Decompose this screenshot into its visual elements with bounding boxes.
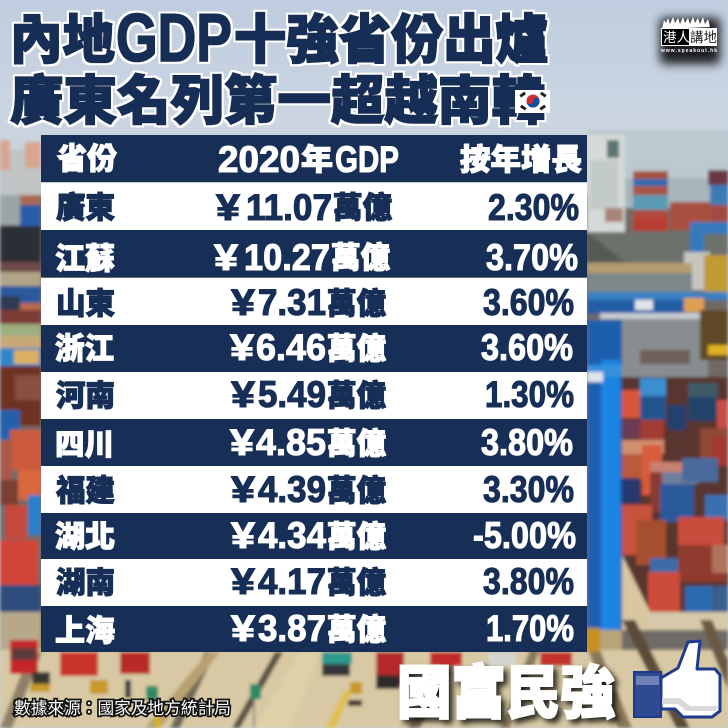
row: 山東: 3.60% <box>483 282 574 323</box>
row: 湖南: 湖南 <box>56 558 115 602</box>
logo: speakout.hk: 講地 <box>690 26 718 46</box>
slogan: 國富民強 <box>397 646 615 728</box>
row: 廣東: 萬億 <box>333 183 392 227</box>
row: 湖北 <box>41 512 587 559</box>
row: 廣東 <box>41 183 587 230</box>
row: 四川: ¥ <box>230 422 254 463</box>
row: 浙江: 浙江 <box>55 324 114 368</box>
row: 福建: ¥ <box>231 469 255 510</box>
row: 河南 <box>41 371 587 419</box>
icon: South Korea flag <box>515 90 550 113</box>
row: 福建 <box>41 466 587 513</box>
row: 湖南: 萬億 <box>327 558 386 602</box>
row: 廣東: 2.30% <box>488 187 579 228</box>
title: 內地 <box>10 0 115 74</box>
trucks <box>10 640 38 674</box>
row: 山東: 山東 <box>56 279 115 323</box>
logo: speakout.hk <box>660 17 720 64</box>
row: 山東: 7.31 <box>258 282 326 323</box>
row: 河南: 河南 <box>56 371 115 415</box>
row: 上海: 1.70% <box>486 608 574 649</box>
row: 湖南: 4.17 <box>258 561 326 602</box>
row: 河南: 1.30% <box>485 374 574 415</box>
containers <box>622 377 728 630</box>
row: 上海: 上海 <box>55 606 115 650</box>
row: 四川: 3.80% <box>481 422 573 463</box>
row: 山東: 萬億 <box>327 279 386 323</box>
row: 上海 <box>41 605 587 652</box>
row: 湖北: 4.34 <box>258 515 326 556</box>
row: 湖南: 3.80% <box>483 561 574 602</box>
icon: thumbs up <box>634 641 720 717</box>
row: 廣東: 11.07 <box>246 187 332 228</box>
row: 廣東: ¥ <box>216 187 240 228</box>
table header row: 2020 <box>218 139 300 180</box>
row: 湖北: 湖北 <box>55 512 115 556</box>
title: GDP <box>116 0 232 76</box>
row: 江蘇: ¥ <box>214 237 238 278</box>
row: 四川: 4.85 <box>256 422 326 463</box>
row: 湖北: -5.00% <box>473 515 576 556</box>
row: 浙江: 6.46 <box>256 327 326 368</box>
table header row: 年 <box>301 135 333 179</box>
row: 上海: ¥ <box>231 608 255 649</box>
table header row: GDP <box>335 139 399 180</box>
right photo area <box>587 130 728 180</box>
row: 山東: ¥ <box>231 282 255 323</box>
row: 上海: 3.87 <box>258 608 326 649</box>
row: 江蘇 <box>41 230 587 278</box>
row: 湖北: 萬億 <box>327 512 386 556</box>
row: 湖南: ¥ <box>231 561 255 602</box>
row: 江蘇: 江蘇 <box>55 234 115 278</box>
row: 河南: 5.49 <box>258 374 326 415</box>
title: 十強省份出爐 <box>234 0 548 74</box>
row: 四川: 萬億 <box>327 419 386 463</box>
title <box>10 0 548 135</box>
row: 福建: 3.30% <box>483 469 574 510</box>
source note: 數據來源：國家及地方統計局 <box>14 694 231 719</box>
row: 浙江: 3.60% <box>481 327 573 368</box>
row: 福建: 福建 <box>56 466 115 510</box>
row: 湖南 <box>41 558 587 606</box>
bottom yard <box>0 650 728 728</box>
row: 福建: 4.39 <box>258 469 326 510</box>
row: 河南: 萬億 <box>327 371 386 415</box>
logo: speakout.hk: 港人 <box>663 26 690 46</box>
logo: speakout.hk: www.speakout.hk <box>660 48 717 54</box>
table <box>41 134 587 652</box>
row: 河南: ¥ <box>231 374 255 415</box>
row: 江蘇: 萬億 <box>331 233 390 277</box>
row: 山東 <box>41 278 587 325</box>
row: 浙江: 萬億 <box>327 324 386 368</box>
title: 廣東名列第一超越南韓 <box>10 59 545 135</box>
row: 江蘇: 3.70% <box>486 237 578 278</box>
row: 廣東: 廣東 <box>56 183 115 227</box>
row: 浙江: ¥ <box>230 327 254 368</box>
row: 四川 <box>41 419 587 466</box>
row: 上海: 萬億 <box>327 605 386 649</box>
table header row: 按年增長 <box>460 135 582 179</box>
row: 江蘇: 10.27 <box>244 237 330 278</box>
row: 福建: 萬億 <box>327 466 386 510</box>
row: 浙江 <box>41 324 587 372</box>
row: 四川: 四川 <box>55 420 114 464</box>
row: 湖北: ¥ <box>231 515 255 556</box>
table header row: 省份 <box>57 134 117 178</box>
table header row <box>41 134 587 182</box>
